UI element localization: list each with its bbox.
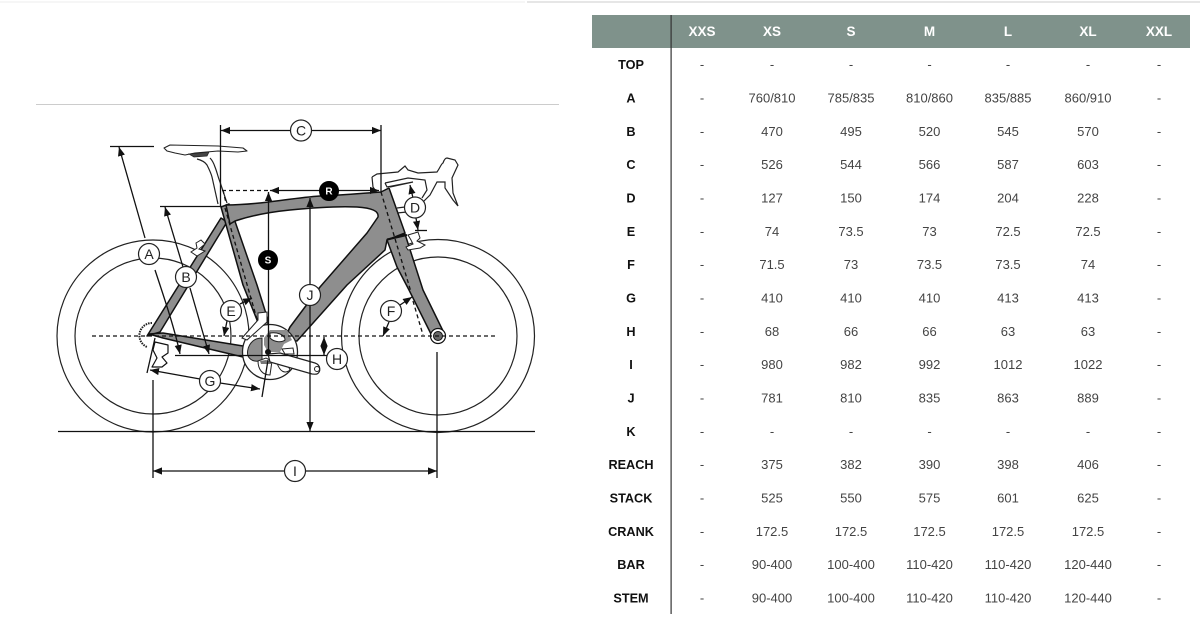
row CRANK [608,524,1161,539]
row STEM: 110-420 [985,590,1031,606]
row G: - [700,290,704,306]
row G [626,290,1161,306]
row A: - [1157,90,1161,106]
row CRANK: 172.5 [1072,524,1104,539]
bike frame [147,188,445,357]
handlebar and stem [372,158,458,213]
row J [627,390,1161,406]
row H: 68 [765,324,779,339]
row STEM: 90-400 [752,590,792,606]
row G: 410 [761,290,783,306]
row REACH: - [700,457,704,472]
row BAR: 120-440 [1064,557,1112,572]
measure I [153,352,437,482]
measure G [147,338,268,397]
table header [592,15,1190,48]
row K: - [770,424,774,439]
row K: - [1086,424,1090,439]
row A: 810/860 [906,90,953,106]
row E: E [627,225,635,239]
row CRANK: - [1157,524,1161,539]
row REACH: 398 [997,457,1019,472]
row REACH: - [1157,457,1161,472]
row F: 73 [844,257,858,272]
row B: 545 [997,124,1019,139]
row F: F [627,258,635,272]
row F: 74 [1081,257,1095,272]
row A [626,90,1161,106]
row C [626,157,1161,172]
cassette [139,323,152,347]
row STEM: STEM [613,592,649,606]
row REACH: REACH [608,458,654,472]
row D: D [626,192,636,206]
measure C: C [296,122,306,138]
table header: M [924,24,935,39]
measure I: I [293,463,297,479]
row STACK: - [700,490,704,506]
row STEM [613,590,1161,606]
row CRANK: 172.5 [835,524,867,539]
row CRANK: - [700,524,704,539]
row TOP: - [1086,57,1090,72]
row G: 410 [840,290,862,306]
measure D: D [410,200,420,216]
row D: 150 [840,190,862,206]
row E: 72.5 [1075,224,1101,239]
row BAR: 100-400 [827,557,875,572]
row H: H [626,325,636,339]
row BAR: 110-420 [906,557,953,572]
row A: 785/835 [828,90,874,106]
row TOP: - [849,57,853,72]
row STACK: 525 [761,490,783,506]
row J: 889 [1077,390,1099,406]
row STEM: 100-400 [827,590,875,606]
row C: C [626,158,636,172]
row D: - [700,190,704,206]
row D: - [1157,190,1161,206]
row STEM: - [700,590,704,606]
front hub [430,328,446,344]
row H: 63 [1081,324,1095,339]
measure H: H [332,351,342,367]
measure E: E [226,303,236,319]
row E: 72.5 [995,224,1021,239]
row STACK: 550 [840,490,862,506]
row I: 982 [840,357,862,372]
row A: A [626,92,636,106]
front brake [406,232,425,250]
row C: 587 [997,157,1019,172]
bike geometry diagram [57,120,535,482]
row D: 127 [761,190,783,206]
measure B: B [181,269,191,285]
row H [626,324,1161,339]
row J: 863 [997,390,1019,406]
row J: J [627,392,635,406]
row C: - [1157,157,1161,172]
row G: - [1157,290,1161,306]
measure H [324,337,348,370]
row CRANK: 172.5 [913,524,946,539]
row REACH: 375 [761,457,783,472]
row CRANK: 172.5 [756,524,788,539]
row G: G [626,292,636,306]
measure D [404,185,427,230]
row J: 810 [840,390,862,406]
row K: - [1157,424,1161,439]
row E: - [1157,224,1161,239]
row B: B [626,125,636,139]
measure B [160,206,222,354]
row C: - [700,157,704,172]
row BAR [617,557,1161,572]
row B: 470 [761,124,783,139]
table header: S [846,24,856,39]
rear derailleur [152,342,168,367]
row REACH [608,457,1161,472]
size table [592,15,1190,614]
row F: - [1157,257,1161,272]
row I: 1022 [1074,357,1102,372]
row F: 73.5 [917,257,942,272]
row TOP: - [1157,57,1161,72]
row H: - [700,324,704,339]
row STEM: - [1157,590,1161,606]
row STACK: 601 [997,490,1019,506]
row I: I [629,358,633,372]
row K: - [1006,424,1010,439]
row H: 66 [922,324,937,339]
row G: 410 [919,290,940,306]
row REACH: 382 [840,457,862,472]
table header: L [1004,24,1012,39]
front wheel [342,240,534,432]
measure G: G [205,373,215,389]
bottom bracket drop line [175,354,330,356]
measure R [222,182,379,200]
row BAR: 90-400 [752,557,792,572]
row TOP: TOP [618,58,644,72]
row B: - [700,124,704,139]
row F: - [700,257,704,272]
row TOP: - [700,57,704,72]
row B: 520 [919,124,940,139]
row A: 860/910 [1064,90,1112,106]
measure C [220,120,381,207]
row F: 73.5 [995,257,1021,272]
row C: 544 [840,157,862,172]
table vertical rule [670,15,672,614]
row G: 413 [997,290,1019,306]
measure J [300,198,320,431]
row F: 71.5 [759,257,785,272]
row BAR: 110-420 [985,557,1031,572]
row BAR: - [1157,557,1161,572]
row G: 413 [1077,290,1099,306]
row C: 566 [919,157,940,172]
row B: 570 [1077,124,1099,139]
row TOP: - [770,57,774,72]
row CRANK: 172.5 [992,524,1024,539]
dashed axle line [92,335,498,337]
row J: - [1157,390,1161,406]
row B: - [1157,124,1161,139]
row D: 228 [1077,190,1099,206]
measure E [220,298,252,336]
row STACK: 575 [919,490,940,506]
rear wheel [57,240,249,432]
measure S: S [265,256,272,266]
row F [627,257,1161,272]
row REACH: 390 [919,457,940,472]
measure R: R [325,186,333,198]
measure A: A [144,246,154,262]
measure F: F [387,303,395,319]
row J: 781 [761,390,783,406]
row H: 66 [844,324,858,339]
row H: 63 [1001,324,1015,339]
row STEM: 110-420 [906,590,953,606]
row K: - [927,424,932,439]
front derailleur [242,312,267,340]
table header: XS [763,24,781,39]
row B [626,124,1161,139]
row STACK: STACK [610,492,653,506]
table header: XXS [688,24,716,39]
row TOP: - [927,57,932,72]
row STACK [610,490,1161,506]
measure J: J [306,287,314,303]
row J: - [700,390,704,406]
row E: - [700,224,704,239]
row A: 760/810 [748,90,796,106]
row I: 992 [919,357,940,372]
row CRANK: CRANK [608,525,655,539]
row K: - [849,424,853,439]
table header: XXL [1146,24,1172,39]
row C: 603 [1077,157,1099,172]
row REACH: 406 [1077,457,1099,472]
row STACK: - [1157,490,1161,506]
row I: 980 [761,357,783,372]
row A: - [700,90,704,106]
rear brake [191,240,205,256]
row BAR: BAR [617,558,645,572]
measure F [380,297,423,336]
row K: K [626,425,636,439]
row J: 835 [919,390,940,406]
row STACK: 625 [1077,490,1099,506]
row BAR: - [700,557,704,572]
row B: 495 [840,124,862,139]
row D [626,190,1161,206]
row A: 835/885 [984,90,1032,106]
row E [627,224,1161,239]
measure A [110,146,180,354]
row E: 73.5 [838,224,864,239]
row STEM: 120-440 [1064,590,1112,606]
row I [629,357,1161,372]
row E: 73 [922,224,937,239]
row I: 1012 [994,357,1022,372]
row C: 526 [761,157,783,172]
saddle and seatpost [164,145,247,204]
row I: - [1157,357,1161,372]
row K: - [700,424,704,439]
chainring and crank [242,324,320,380]
row E: 74 [765,224,779,239]
table header: XL [1079,24,1097,39]
measure S [258,192,278,352]
row K [626,424,1161,439]
row D: 204 [997,190,1019,206]
row D: 174 [919,190,940,206]
row I: - [700,357,704,372]
row H: - [1157,324,1161,339]
row TOP [618,57,1161,72]
ground line [58,430,535,432]
row TOP: - [1006,57,1010,72]
